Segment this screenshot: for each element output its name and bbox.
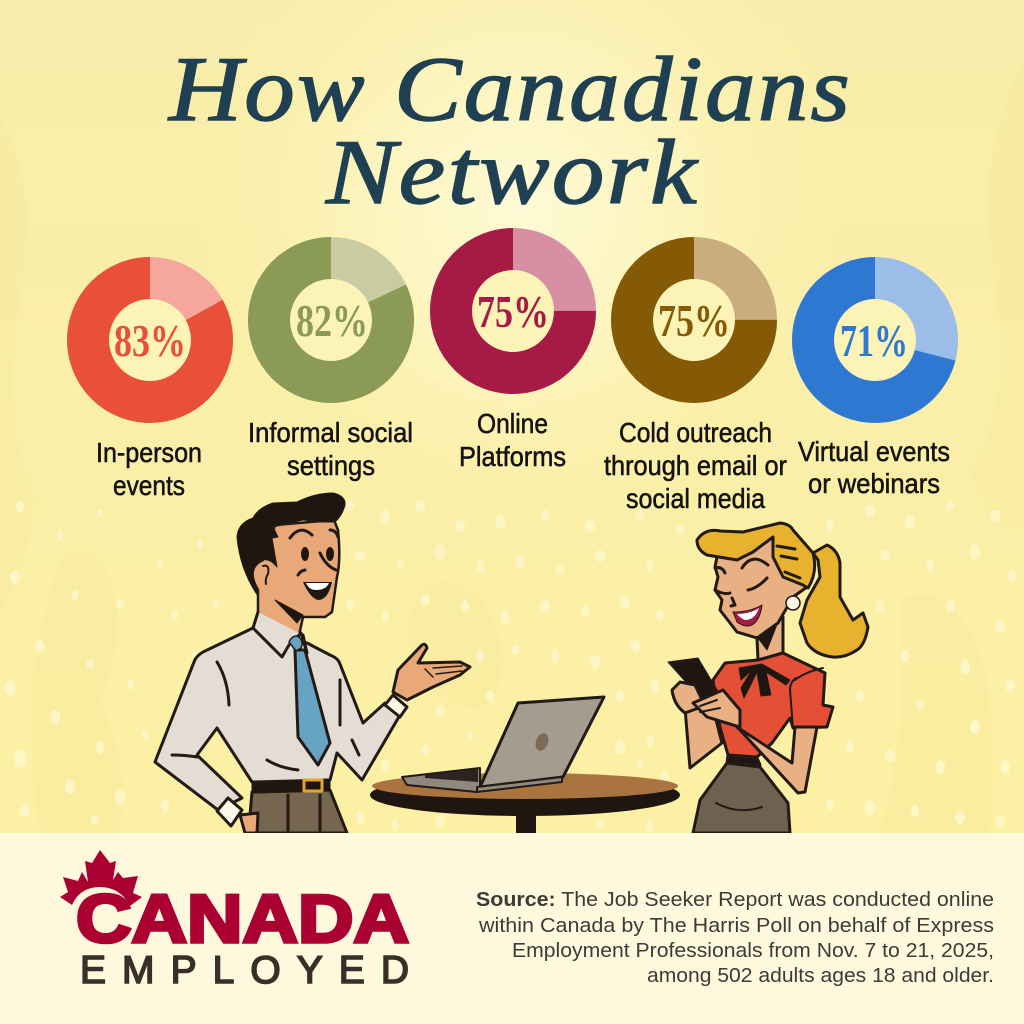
title: How Canadians [168, 38, 852, 140]
labels: Platforms [459, 441, 566, 472]
tie [295, 650, 330, 765]
face [715, 537, 807, 638]
source note: among 502 adults ages 18 and older. [647, 965, 994, 987]
collar [253, 612, 307, 657]
labels: or webinars [808, 468, 940, 499]
labels: Cold outreach [619, 417, 772, 448]
hand gesture and cuff [393, 644, 470, 700]
near arm [737, 727, 817, 793]
hair [237, 493, 345, 596]
donut: in-person events 83%: 83% [114, 315, 186, 366]
title: Network [325, 121, 699, 223]
source note: Source: The Job Seeker Report was conducted online [476, 889, 994, 911]
labels: Informal social [248, 417, 413, 448]
belt and buckle [252, 779, 330, 793]
icon: maple leaf [60, 850, 142, 906]
eyes [301, 547, 334, 561]
trousers [250, 790, 347, 833]
phone [668, 658, 723, 703]
donut: informal social settings 82% [269, 258, 393, 382]
donut: cold outreach 75% [632, 258, 756, 382]
title [168, 38, 852, 223]
belt [727, 755, 760, 765]
shirt [155, 628, 400, 810]
wordmark sub: EMPLOYED [80, 949, 409, 992]
illustration: table [370, 773, 680, 833]
shirt creases [172, 662, 359, 833]
smile [733, 605, 762, 626]
labels [96, 408, 950, 514]
labels: social media [626, 483, 765, 514]
hands [672, 682, 705, 713]
source note [476, 889, 994, 987]
donut: online platforms 75% [451, 249, 575, 373]
neck [757, 617, 783, 660]
donut: online platforms 75%: 75% [477, 286, 549, 337]
bow [739, 664, 790, 698]
labels: In-person [96, 437, 202, 468]
illustration: woman [668, 523, 868, 833]
donut: virtual events 71% [813, 278, 937, 402]
skirt [693, 763, 790, 833]
skirt crease [716, 803, 762, 810]
mouth [303, 582, 332, 600]
donut: virtual events 71%: 71% [840, 315, 908, 366]
ponytail [800, 545, 868, 657]
labels: Virtual events [798, 436, 950, 467]
labels: events [113, 470, 185, 501]
donut: in-person events 83% [88, 278, 212, 402]
source note: within Canada by The Harris Poll on behalf of Express [478, 915, 994, 937]
face and neck [253, 520, 339, 640]
brows and face lines [290, 530, 338, 575]
labels: through email or [604, 450, 787, 481]
donut: informal social settings 82%: 82% [296, 295, 368, 346]
illustration: man [155, 493, 470, 833]
blouse [713, 653, 833, 757]
hair [697, 523, 815, 588]
source note: Employment Professionals from Nov. 7 to 21, 2025, [512, 940, 994, 962]
illustration: laptop [402, 697, 604, 792]
donut: cold outreach 75%: 75% [658, 295, 730, 346]
ear [263, 566, 268, 584]
earring [786, 596, 800, 610]
logo [60, 850, 409, 992]
hip hand and cuff [240, 813, 258, 833]
labels: settings [287, 450, 375, 481]
footer band [0, 833, 1024, 1024]
labels: Online [477, 408, 548, 439]
closed eyes and brows [715, 546, 800, 606]
wordmark: CANADA [76, 881, 409, 957]
blouse detail [790, 668, 823, 728]
far arm [685, 708, 722, 768]
